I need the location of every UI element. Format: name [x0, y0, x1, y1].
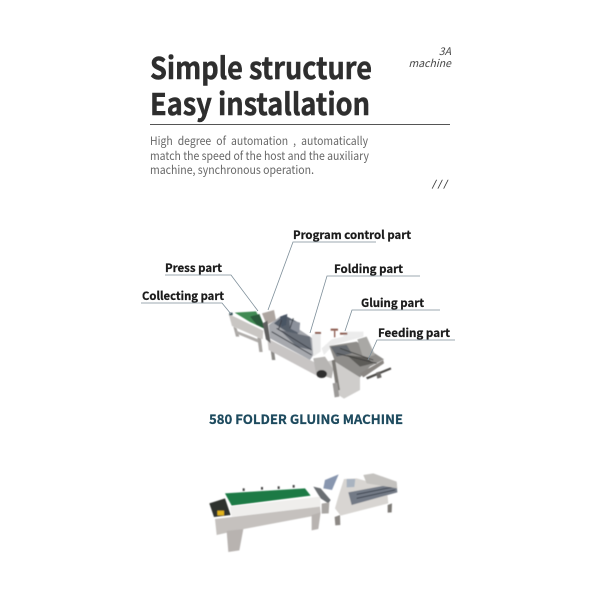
icon: three slashes: /// — [431, 177, 450, 190]
middle white arch — [312, 332, 363, 357]
label: folding part — [310, 261, 420, 333]
label: press part: Press part — [165, 260, 222, 276]
machine caption: 580 FOLDER GLUING MACHINE — [209, 409, 403, 428]
collecting section — [229, 311, 266, 352]
label: collecting part: Collecting part — [142, 288, 224, 304]
machine diagram: full folder gluer — [229, 310, 391, 399]
description text: High degree of automation , automatically — [150, 133, 368, 149]
tag: 3A machine: machine — [409, 56, 452, 71]
rear legs — [227, 529, 243, 552]
label: feeding part — [368, 325, 455, 360]
main frame — [263, 314, 317, 376]
description text — [150, 133, 369, 178]
tag: 3A machine — [409, 44, 452, 71]
press and transfer section — [313, 487, 331, 503]
label: press part — [165, 260, 258, 311]
title: Easy installation — [150, 80, 370, 124]
machine photo: side view — [209, 473, 397, 552]
label: folding part: Folding part — [334, 261, 403, 277]
white cover and side panel — [230, 497, 321, 517]
label: program control part: Program control part — [293, 227, 411, 243]
label: feeding part: Feeding part — [378, 325, 450, 341]
delivery belt — [225, 488, 311, 506]
red-brown adjusters — [315, 329, 347, 337]
tag: 3A machine: 3A — [439, 44, 452, 59]
label: gluing part: Gluing part — [361, 295, 424, 311]
description text: machine, synchronous operation. — [150, 162, 314, 178]
gluing and feeding section — [313, 337, 391, 399]
description text: match the speed of the host and the auxiliary — [150, 148, 369, 164]
heading rule — [150, 124, 450, 125]
control box — [262, 310, 276, 325]
label: gluing part — [345, 295, 440, 331]
title — [150, 44, 372, 124]
label: program control part — [268, 227, 411, 310]
label: collecting part — [141, 288, 231, 314]
title: Simple structure — [150, 44, 372, 88]
folding section — [335, 478, 388, 516]
